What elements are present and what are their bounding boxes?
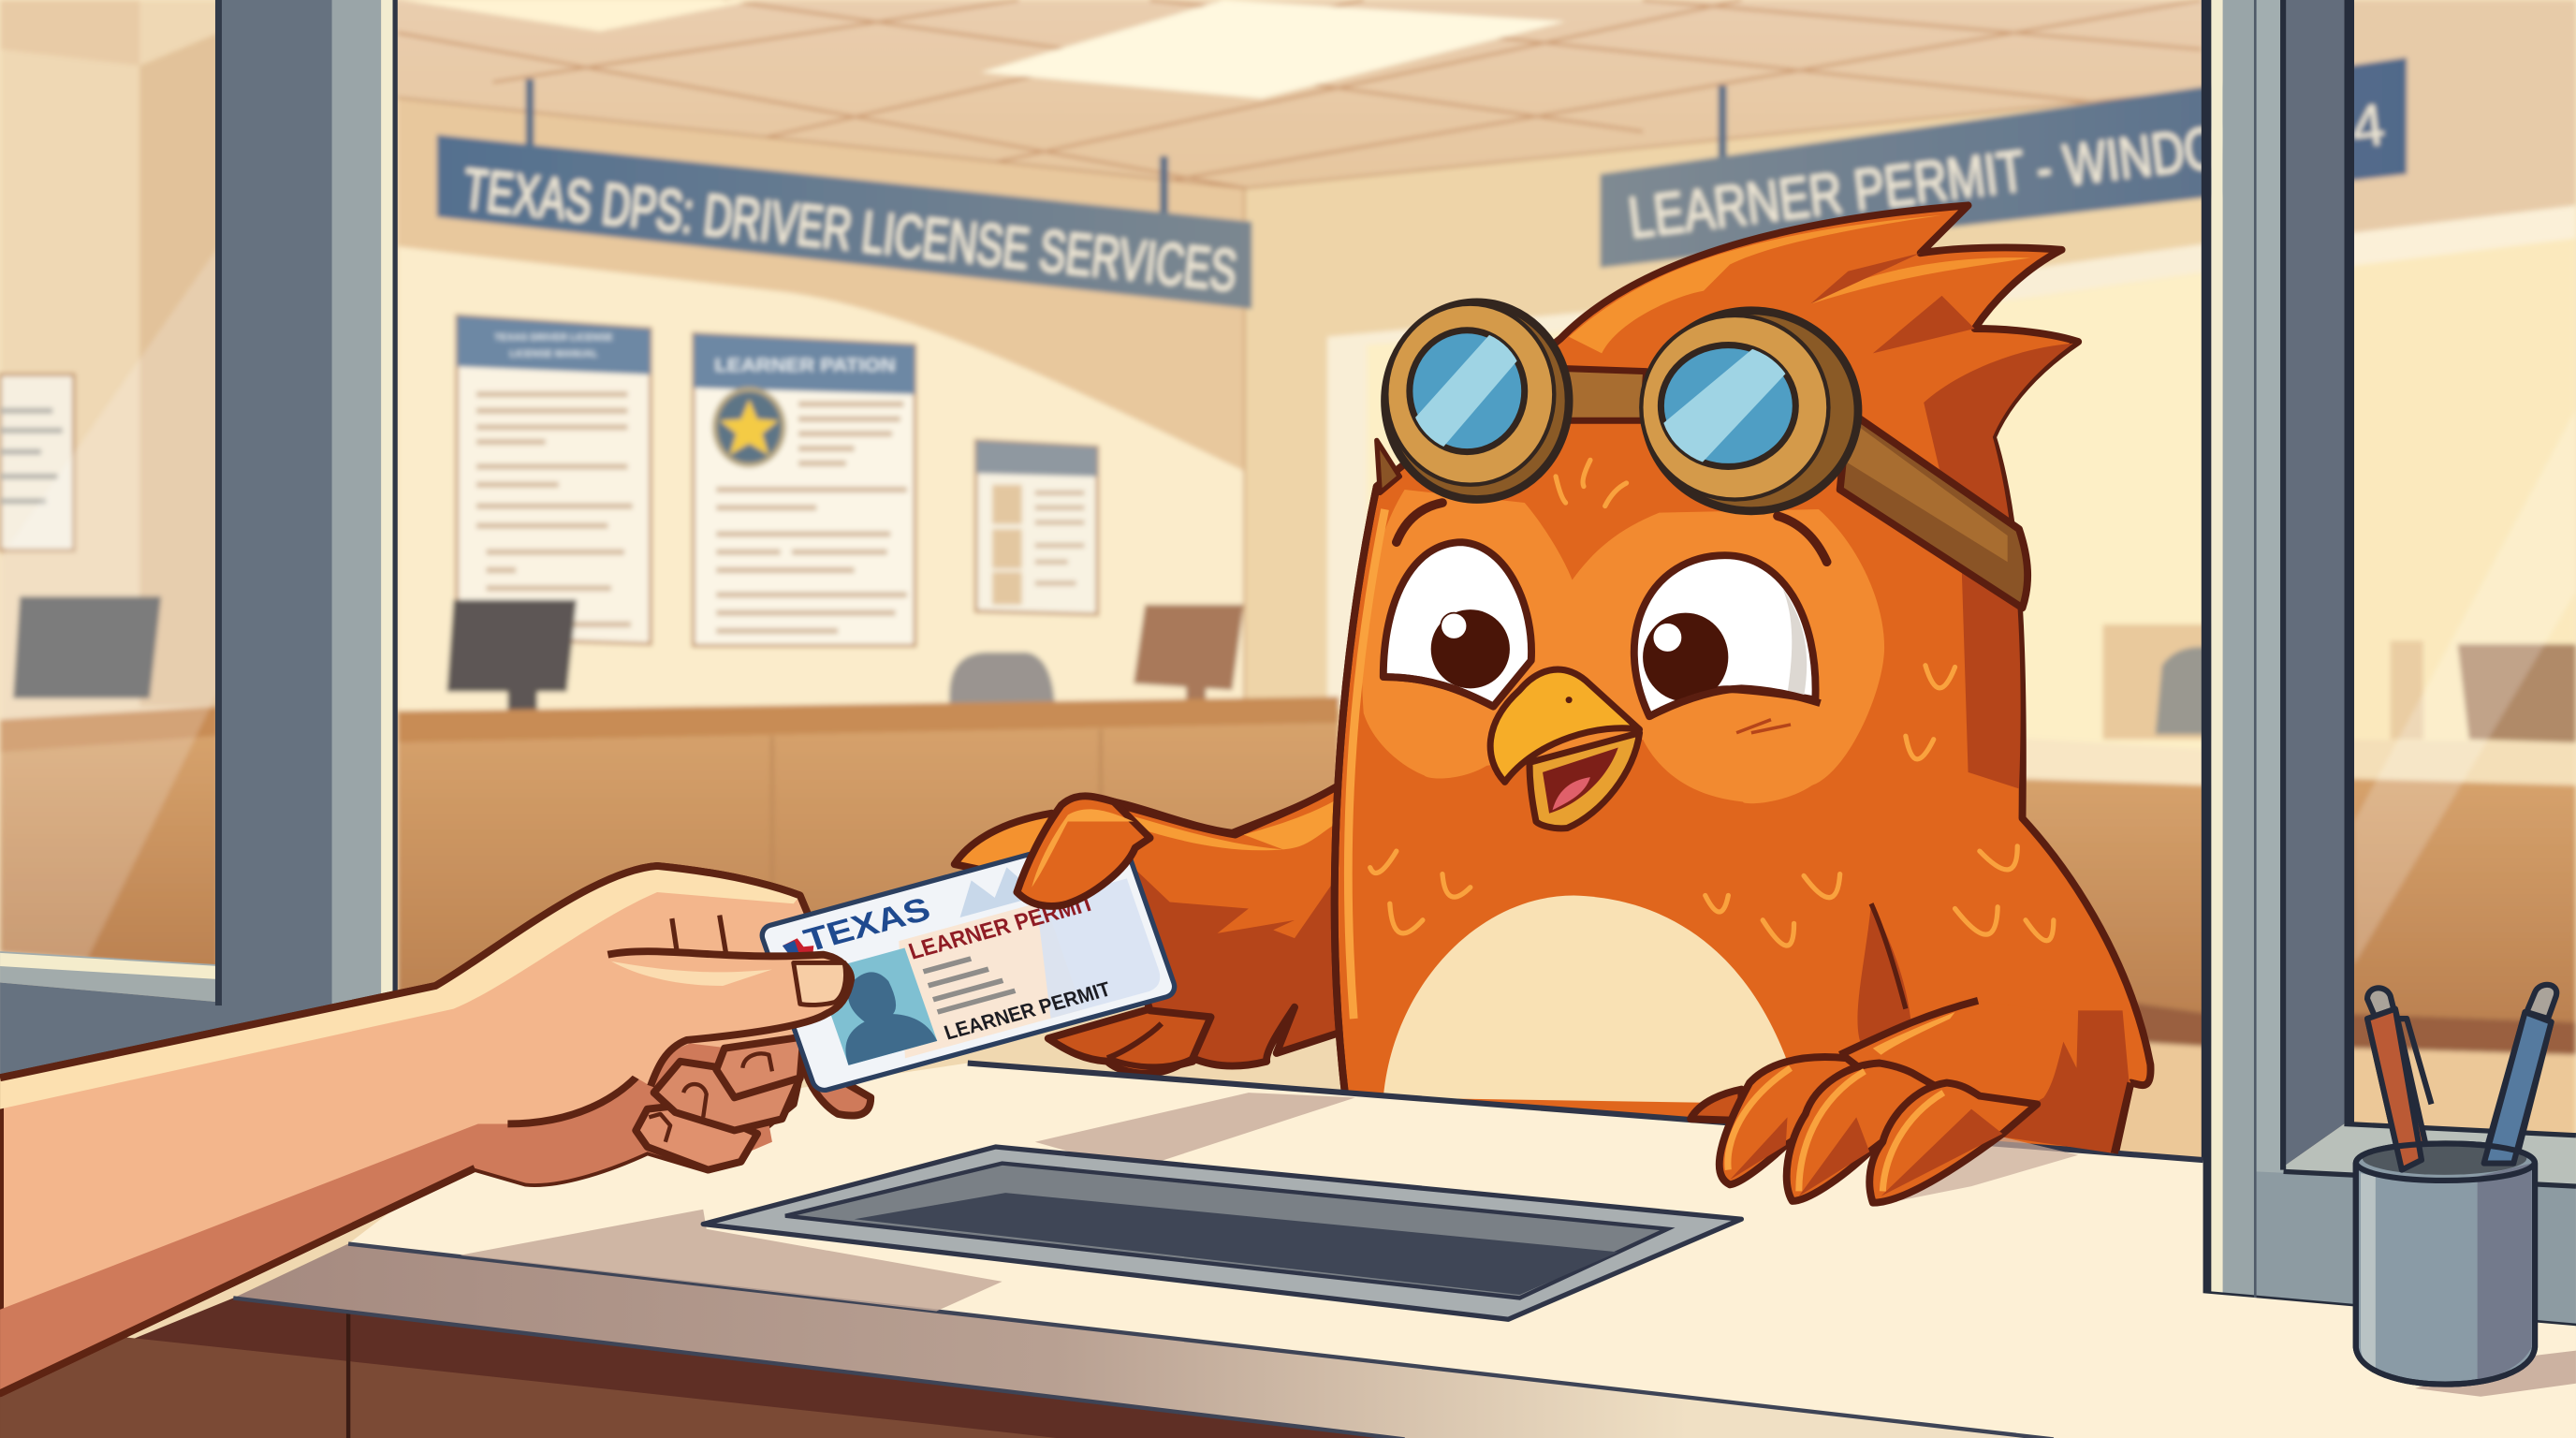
right eye: [1634, 555, 1821, 733]
bird body: [1335, 205, 2151, 1158]
left window view: [0, 0, 222, 986]
sign: window 4: 4: [2348, 92, 2389, 161]
ceiling lights: [402, 0, 1566, 98]
little finger: [636, 1104, 757, 1170]
facial mask: [1362, 490, 1884, 803]
goggle strap: [1377, 368, 2027, 608]
mouth: [1530, 733, 1640, 829]
card title: TEXAS: [799, 891, 935, 959]
right window frame: [2202, 0, 2576, 1326]
poster: small notice: [976, 440, 1097, 614]
bird left wing: [955, 785, 1342, 1074]
poster: license requirements: [457, 315, 651, 644]
red permit label: LEARNER PERMIT: [906, 890, 1098, 965]
finger behind card: [805, 1060, 871, 1116]
pen cup: [2356, 985, 2556, 1385]
middle finger: [654, 1062, 800, 1130]
ID photo: [816, 948, 937, 1065]
sign: Texas DPS: [437, 79, 1251, 309]
crest highlights and shadow: [1569, 215, 2073, 788]
sign: window 4: LEARNER PERMIT - WINDOW: [1625, 110, 2266, 251]
bird finger over card: [1017, 796, 1150, 906]
beak: [1490, 669, 1640, 782]
human thumb: [575, 916, 851, 1086]
poster: learner pation: [694, 333, 915, 646]
back counter left: [398, 697, 1339, 1003]
poster: license requirements: LICENSE MANUAL: [509, 348, 598, 360]
human hand and arm: [0, 866, 871, 1393]
deal tray: [703, 1147, 1741, 1319]
back monitors and chair: [446, 600, 1244, 710]
right window view: [2349, 0, 2576, 1151]
brows: [1397, 503, 1827, 562]
belly: [1383, 895, 1801, 1104]
index finger: [716, 1036, 803, 1097]
counter cabinet: [0, 1298, 1405, 1438]
feather marks: [1370, 460, 2054, 1029]
bird right wing and claws: [1690, 1001, 2130, 1203]
data lines: [923, 950, 1015, 1012]
left window frame: [0, 0, 398, 1084]
sign: Texas DPS: TEXAS DPS: DRIVER LICENSE SERVICES: [461, 156, 1240, 304]
right goggle: [1641, 311, 1858, 511]
left eye: [1383, 542, 1531, 707]
poster: learner pation: LEARNER PATION: [714, 357, 896, 376]
poster: license requirements: TEXAS DRIVER LICENSE: [494, 331, 613, 343]
learner permit card: [759, 829, 1178, 1093]
desk shadows: [460, 1093, 2576, 1397]
left wall: [398, 98, 1245, 710]
ceiling: [394, 0, 2210, 189]
card tint: [867, 902, 1082, 1058]
desk top: [233, 1064, 2576, 1438]
right wall: [1245, 91, 2217, 756]
left goggle: [1385, 302, 1569, 500]
Texas flag icon: [782, 934, 818, 967]
back counter right: [2017, 738, 2210, 1170]
black permit label: LEARNER PERMIT: [941, 977, 1114, 1045]
